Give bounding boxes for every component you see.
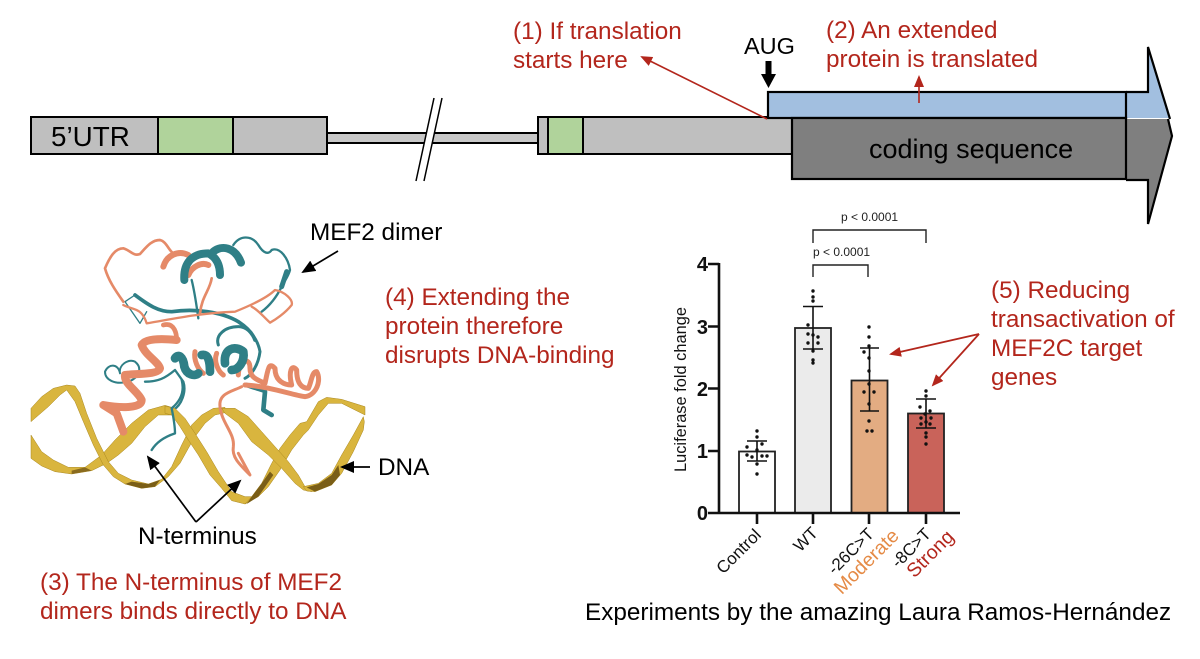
credit: Experiments by the amazing Laura Ramos-Hernández [585, 599, 1171, 626]
y-axis tick labels: 2 [697, 379, 708, 401]
annotation 5: MEF2C target [991, 335, 1142, 362]
severity labels: Strong [902, 526, 959, 582]
annotation 5 [991, 277, 1175, 391]
orange chain [103, 240, 319, 432]
MEF2 dimer label: MEF2 dimer [310, 219, 442, 246]
y-axis tick labels [697, 254, 709, 525]
bars [739, 328, 944, 513]
N-terminal tails [152, 380, 250, 475]
teal helices [175, 248, 244, 375]
p-value labels: p < 0.0001 [841, 210, 898, 224]
DNA front ribbons [222, 408, 364, 492]
category labels: -26C>T [824, 524, 878, 578]
coding sequence arrow [792, 118, 1172, 224]
5'UTR first exon [31, 117, 327, 154]
y-axis tick labels: 0 [697, 503, 708, 525]
annotation 5 arrows [891, 334, 979, 385]
intron connector [327, 133, 538, 143]
annotation 3 [40, 569, 347, 625]
annotation 1 [513, 18, 682, 74]
DNA arrow [342, 466, 370, 468]
annotation 1: starts here [513, 47, 628, 74]
significance brackets [813, 230, 926, 277]
annotation 4: (4) Extending the [385, 284, 570, 311]
annotation 4: protein therefore [385, 313, 563, 340]
category labels: WT [790, 523, 822, 556]
annotation 2 [826, 17, 1038, 73]
teal chain [105, 237, 290, 415]
y-axis title: Luciferase fold change [672, 307, 690, 472]
annotation 1: (1) If translation [513, 18, 682, 45]
p-value labels [813, 210, 898, 259]
y-axis tick labels: 1 [697, 441, 708, 463]
annotation 3: dimers binds directly to DNA [40, 598, 347, 625]
extended protein blue bar [768, 47, 1170, 119]
DNA rear ribbons [31, 385, 225, 488]
5'UTR first exon: 5’UTR [51, 121, 130, 152]
annotation 2: (2) An extended [826, 17, 998, 44]
AUG arrow [761, 61, 776, 88]
severity labels [830, 525, 959, 599]
axes [708, 263, 960, 524]
annotation 4: disrupts DNA-binding [385, 342, 615, 369]
annotation 5: genes [991, 364, 1057, 391]
AUG label: AUG [744, 33, 795, 59]
N-terminus label: N-terminus [138, 523, 257, 550]
error bars [747, 306, 936, 461]
category labels [713, 523, 935, 578]
annotation 5: (5) Reducing [991, 277, 1130, 304]
coding sequence arrow: coding sequence [869, 134, 1073, 164]
annotation 2 arrow [918, 77, 920, 103]
annotation 3: (3) The N-terminus of MEF2 [40, 569, 342, 596]
annotation 1 arrow [642, 57, 767, 119]
category labels: Control [713, 525, 765, 578]
annotation 4 [385, 284, 615, 369]
y-axis tick labels: 3 [697, 317, 708, 339]
data points [745, 289, 933, 476]
bar chart [672, 210, 960, 599]
DNA middle ribbons [165, 397, 365, 504]
p-value labels: p < 0.0001 [813, 245, 870, 259]
N-terminus arrows [148, 457, 240, 522]
severity labels: Moderate [830, 525, 904, 599]
second exon [538, 117, 792, 154]
gene diagram [31, 33, 1172, 224]
protein-DNA structure [31, 237, 365, 504]
annotation 5: transactivation of [991, 306, 1175, 333]
intron break mark [416, 98, 442, 181]
y-axis tick labels: 4 [697, 254, 709, 276]
category labels: -8C>T [888, 524, 935, 572]
annotation 2: protein is translated [826, 46, 1038, 73]
DNA label: DNA [378, 454, 430, 481]
MEF2 dimer arrow [303, 251, 338, 272]
